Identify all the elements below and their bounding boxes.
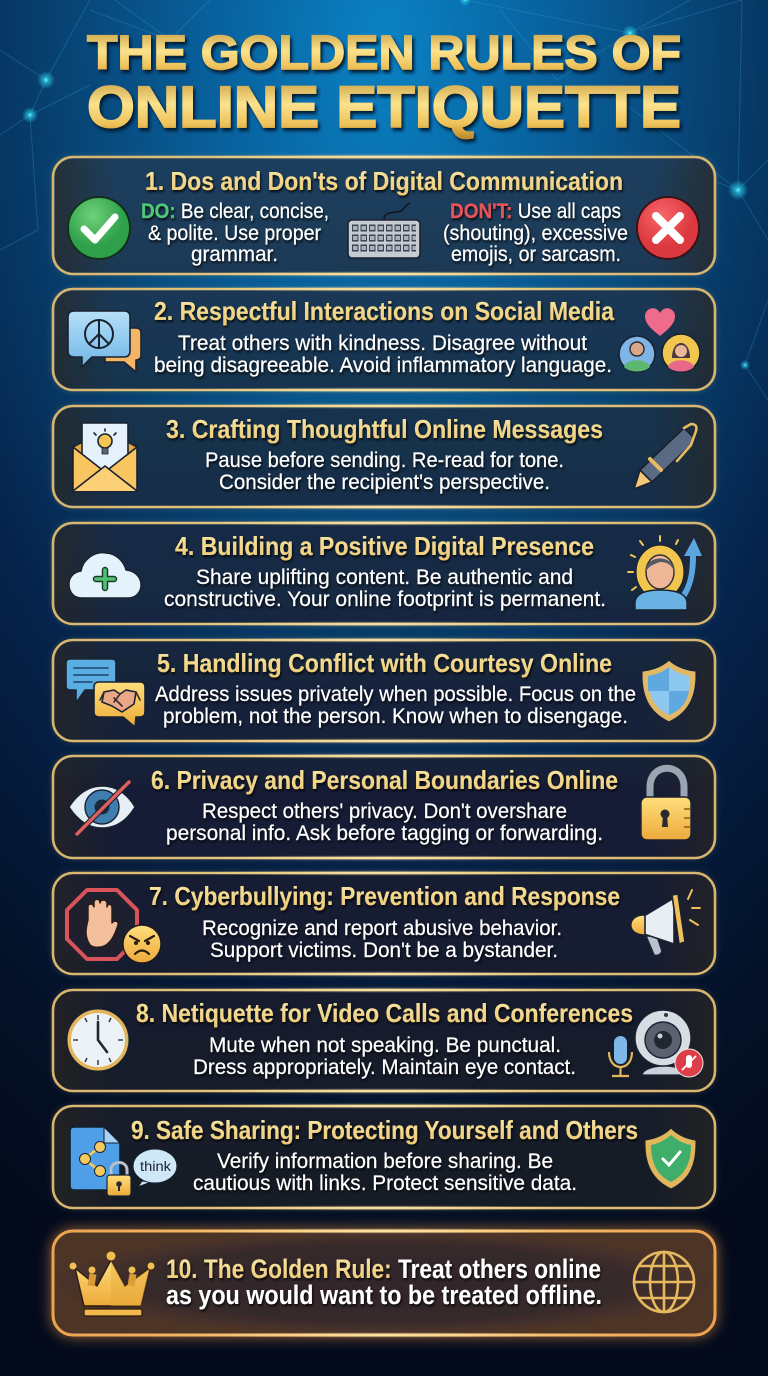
body 2: being disagreeable. Avoid inflammatory language. [154, 354, 612, 377]
panel 3: thoughtful messages [53, 403, 715, 510]
icon: think bubble [133, 1149, 177, 1187]
DO text: DO: Be clear, concise, [141, 200, 329, 223]
body 9: Verify information before sharing. Be [217, 1150, 553, 1173]
DO text: grammar. [191, 243, 278, 266]
DON'T text: DON'T: Use all caps [450, 200, 621, 223]
heading 6: 6. Privacy and Personal Boundaries Online [151, 765, 618, 795]
panel 6: privacy [53, 753, 715, 861]
body 4: Share uplifting content. Be authentic and [196, 566, 573, 589]
body 9: cautious with links. Protect sensitive data. [193, 1172, 577, 1195]
body 5 [155, 683, 636, 728]
body 8: Mute when not speaking. Be punctual. [209, 1034, 561, 1057]
golden rule text [166, 1254, 602, 1310]
icon: chat bubbles with handshake [66, 659, 145, 727]
panel 9: safe sharing [53, 1103, 715, 1211]
panel 7: cyberbullying [53, 870, 715, 977]
panel 5: handling conflict [53, 637, 715, 744]
body 3 [205, 449, 564, 494]
DO text [141, 200, 329, 266]
body 2: Treat others with kindness. Disagree without [178, 332, 587, 355]
body 3: Consider the recipient's perspective. [219, 471, 550, 494]
icon: peace speech bubbles [68, 311, 141, 372]
heading 5: 5. Handling Conflict with Courtesy Online [157, 648, 612, 678]
icon: crossed-out eye [69, 782, 135, 834]
icon: megaphone [631, 890, 700, 956]
heading 4: 4. Building a Positive Digital Presence [175, 531, 594, 561]
body 5: problem, not the person. Know when to disengage. [163, 705, 628, 728]
panel 10: the golden rule [53, 1228, 715, 1338]
DON'T text [443, 200, 628, 266]
icon: keyboard [348, 203, 420, 258]
body 8 [193, 1034, 576, 1079]
DO text: & polite. Use proper [148, 222, 321, 245]
body 7 [202, 917, 562, 962]
golden rule text: as you would want to be treated offline. [166, 1280, 602, 1310]
icon: crown [70, 1252, 154, 1316]
icon: padlock [641, 768, 691, 840]
heading 7: 7. Cyberbullying: Prevention and Response [149, 881, 620, 911]
icon: heart and people [619, 308, 700, 372]
icon: clock [67, 1009, 129, 1071]
icon: stop hand [67, 890, 137, 959]
icon: green check [68, 197, 130, 259]
panel 8: video calls [53, 987, 715, 1094]
icon: angry face [123, 925, 161, 963]
panel 2: social media [53, 286, 715, 393]
heading 3: 3. Crafting Thoughtful Online Messages [166, 414, 603, 444]
body 8: Dress appropriately. Maintain eye contact. [193, 1056, 576, 1079]
icon: red cross [637, 197, 699, 259]
icon: person with rising arrow [628, 536, 702, 610]
title: ONLINE ETIQUETTE [87, 75, 681, 140]
DON'T text: emojis, or sarcasm. [451, 243, 621, 266]
title [87, 27, 681, 140]
icon: shared file with lock [70, 1127, 131, 1196]
body 4: constructive. Your online footprint is permanent. [164, 588, 606, 611]
panel 4: digital presence [53, 520, 715, 627]
body 5: Address issues privately when possible. Focus on the [155, 683, 636, 706]
body 4 [164, 566, 606, 611]
golden rule text: 10. The Golden Rule: Treat others online [166, 1254, 601, 1284]
heading 1: 1. Dos and Don'ts of Digital Communication [145, 166, 623, 196]
body 7: Support victims. Don't be a bystander. [210, 939, 558, 962]
icon: cloud with plus [69, 553, 141, 598]
heading 8: 8. Netiquette for Video Calls and Conferences [136, 998, 633, 1028]
icon: globe [634, 1252, 694, 1312]
body 9 [193, 1150, 577, 1195]
DON'T text: (shouting), excessive [443, 222, 628, 245]
body 6: Respect others' privacy. Don't overshare [202, 800, 567, 823]
heading 9: 9. Safe Sharing: Protecting Yourself and Others [131, 1115, 638, 1145]
icon: green shield [645, 1128, 696, 1189]
title: THE GOLDEN RULES OF [87, 27, 681, 80]
icon: pen [634, 424, 696, 489]
icon: microphone [609, 1036, 632, 1076]
icon: webcam with muted badge [635, 1010, 703, 1077]
body 3: Pause before sending. Re-read for tone. [205, 449, 564, 472]
icon: think bubble: think [140, 1158, 172, 1174]
body 6: personal info. Ask before tagging or forwarding. [166, 822, 603, 845]
icon: blue shield [642, 660, 696, 722]
body 6 [166, 800, 603, 845]
panel 1: dos and don'ts [53, 154, 715, 277]
body 2 [154, 332, 612, 377]
heading 2: 2. Respectful Interactions on Social Media [154, 296, 614, 326]
icon: envelope with idea [73, 423, 137, 491]
body 7: Recognize and report abusive behavior. [202, 917, 562, 940]
